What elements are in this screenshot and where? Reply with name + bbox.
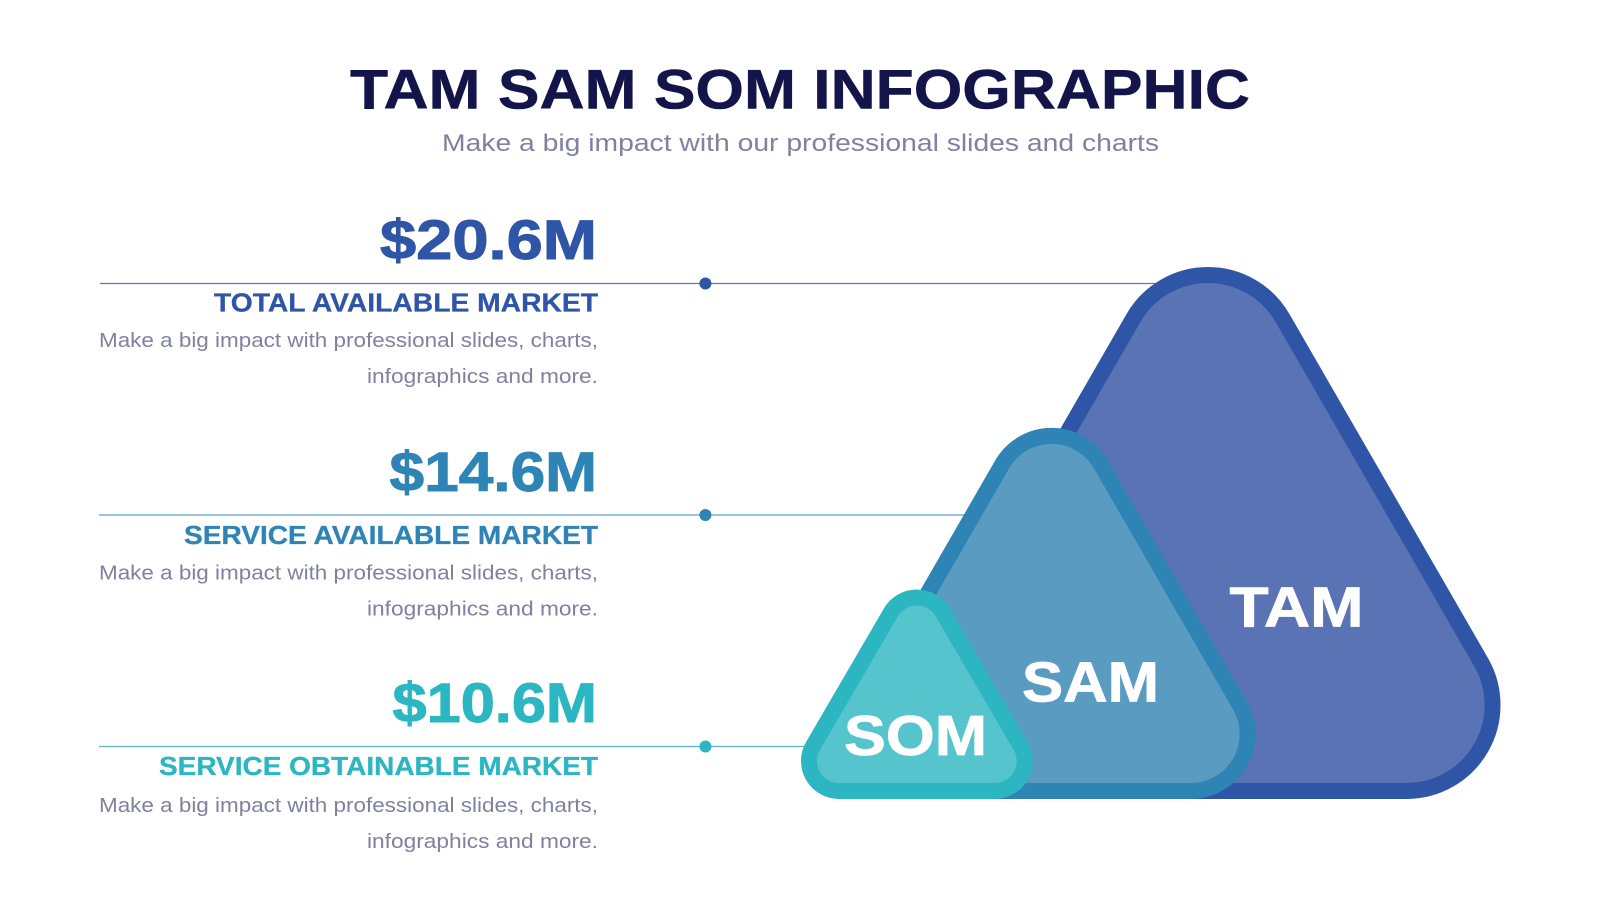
block: service obtainable market xyxy=(99,671,598,853)
block: total available market xyxy=(99,208,598,388)
connector line: SOM xyxy=(99,740,815,752)
label: SOM: SERVICE OBTAINABLE MARKET xyxy=(159,751,598,781)
value: SAM: $14.6M xyxy=(390,440,597,503)
description: SOM xyxy=(99,795,598,853)
description: TAM: Make a big impact with professional slides, charts, xyxy=(99,330,598,352)
description: SOM: Make a big impact with professional slides, charts, xyxy=(99,795,598,817)
triangle: SAM xyxy=(855,436,1248,791)
triangle: SOM xyxy=(809,597,1025,791)
description: SAM xyxy=(99,562,598,620)
description: TAM: infographics and more. xyxy=(367,366,598,388)
description: TAM xyxy=(99,330,598,388)
description: SAM: Make a big impact with professional slides, charts, xyxy=(99,562,598,584)
block: service available market xyxy=(99,440,598,620)
value: TAM: $20.6M xyxy=(380,208,597,271)
triangle: SAM: SAM xyxy=(1022,650,1159,714)
connector line: SAM xyxy=(99,509,975,521)
description: SOM: infographics and more. xyxy=(367,831,598,853)
triangle: SOM: SOM xyxy=(844,704,987,768)
label: TAM: TOTAL AVAILABLE MARKET xyxy=(214,288,598,318)
label: SAM: SERVICE AVAILABLE MARKET xyxy=(184,520,598,550)
description: SAM: infographics and more. xyxy=(367,598,598,620)
triangle: TAM xyxy=(923,275,1493,791)
connector line: TAM xyxy=(100,278,1160,290)
subtitle: Make a big impact with our professional slides and charts xyxy=(442,130,1159,157)
title: TAM SAM SOM INFOGRAPHIC xyxy=(350,58,1250,120)
triangle: TAM: TAM xyxy=(1230,576,1364,640)
value: SOM: $10.6M xyxy=(392,671,597,734)
